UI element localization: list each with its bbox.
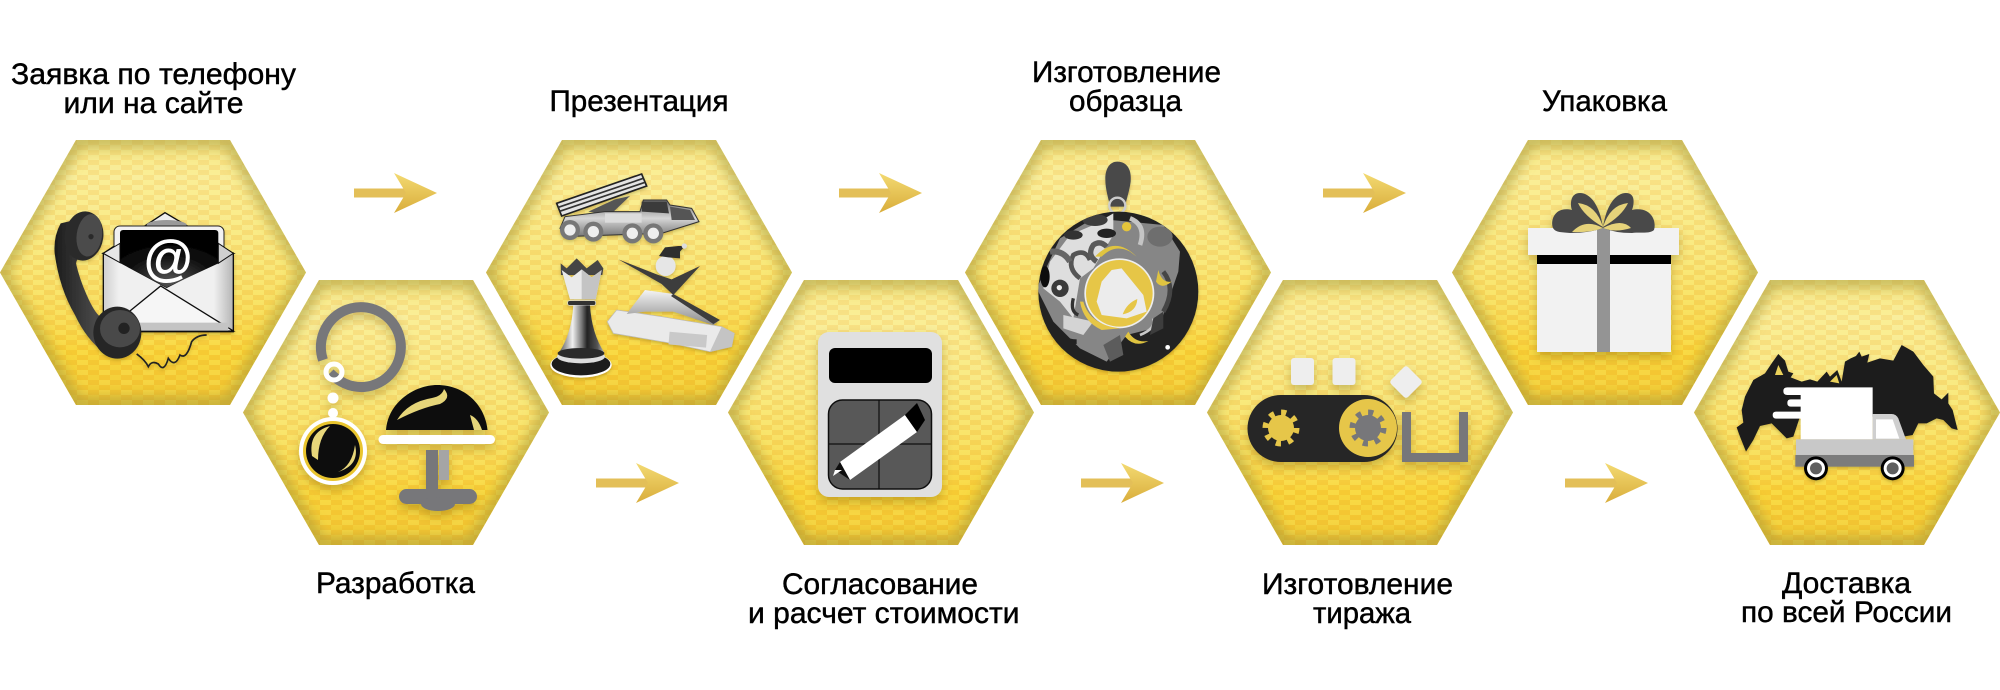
label: step 6: Изготовление [1262,568,1453,601]
icon: cufflink [378,385,495,511]
label: step 7: Упаковка [1542,85,1667,118]
label: step 1: Заявка по телефону [11,58,296,91]
label: step 2: Разработка [316,567,475,600]
label: step 5 [1032,56,1221,118]
label: step 4: и расчет стоимости [748,597,1020,630]
label: step 6: тиража [1313,597,1411,630]
label: step 1 [11,58,296,120]
label: step 1: или на сайте [64,87,244,120]
arrow 3 [1323,173,1406,213]
icon: keychain [299,307,401,485]
arrow 2 [839,173,922,213]
arrow 6 [1565,463,1648,503]
icon: gift box [1528,193,1679,352]
panel: hexagon 5 [965,140,1271,405]
arrow 5 [1081,463,1164,503]
icon: pendant [1037,162,1198,372]
label: step 8: Доставка [1782,567,1911,600]
label: step 4: Согласование [782,568,978,601]
label: step 5: образца [1069,85,1182,118]
icon: map of Russia with truck [1737,345,1958,480]
panel: hexagon 3 [486,140,792,405]
icon: production line [1248,358,1468,462]
arrow 1 [354,173,437,213]
panel: hexagon 7 [1452,140,1758,405]
panel: hexagon 4 [728,280,1034,545]
panel: hexagon 1 [0,140,306,405]
panel: hexagon 8 [1694,280,2000,545]
label: step 3: Презентация [550,85,728,118]
icon: phone and envelope: @ [143,231,194,287]
arrow 4 [596,463,679,503]
panel: hexagon 6 [1207,280,1513,545]
icon: phone and envelope [54,209,233,368]
label: step 6 [1262,568,1453,630]
label: step 4 [748,568,1020,630]
panel: hexagon 2 [243,280,549,545]
icon: metal souvenirs [550,174,734,378]
label: step 8 [1741,567,1952,629]
label: step 8: по всей России [1741,596,1952,629]
label: step 5: Изготовление [1032,56,1221,89]
icon: calculator [818,332,942,497]
